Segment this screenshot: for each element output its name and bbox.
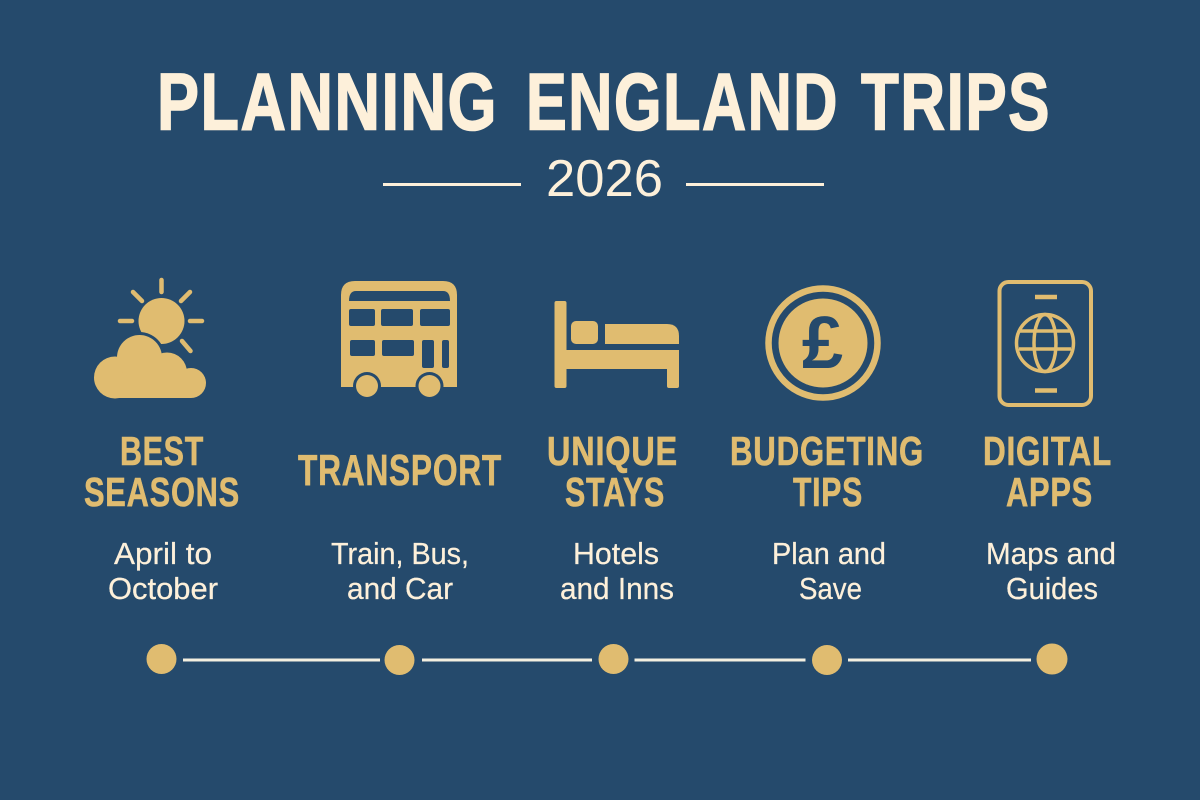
text: maps and guides (986, 536, 1116, 606)
icon: phone with globe (1000, 282, 1091, 405)
heading: best seasons: SEASONS (84, 469, 240, 515)
icon: pound coin (768, 288, 878, 398)
text: plan and save: Plan and (772, 536, 886, 571)
panel: digital apps (983, 282, 1116, 606)
subtitle: year with rules (383, 150, 824, 208)
icon: double-decker bus (341, 281, 457, 400)
heading: digital apps: DIGITAL (983, 428, 1112, 474)
icon: pound coin: £ (802, 301, 843, 384)
subtitle: year with rules: 2026 (546, 150, 663, 208)
title (157, 58, 1051, 148)
panel: unique stays (547, 301, 679, 606)
title: TRIPS (861, 58, 1051, 148)
panel: transport (298, 281, 502, 606)
text: april to october (108, 536, 218, 606)
text: april to october: April to (114, 536, 212, 571)
heading: budgeting tips: BUDGETING (730, 428, 924, 474)
heading: unique stays: STAYS (565, 469, 665, 515)
text: train, bus, and car (331, 536, 469, 606)
text: plan and save: Save (799, 571, 862, 606)
heading: best seasons (84, 428, 240, 515)
text: plan and save (772, 536, 886, 606)
heading: budgeting tips (730, 428, 924, 515)
text: hotels and inns (560, 536, 674, 606)
panel: budgeting tips (730, 288, 924, 606)
text: hotels and inns: and Inns (560, 571, 674, 606)
text: train, bus, and car: Train, Bus, (331, 536, 469, 571)
icon: sun and cloud (94, 280, 206, 398)
text: hotels and inns: Hotels (573, 536, 659, 571)
timeline (146, 644, 1068, 675)
title: PLANNING (157, 58, 498, 148)
heading: best seasons: BEST (120, 428, 204, 474)
heading: transport: TRANSPORT (298, 446, 502, 495)
text: maps and guides: Guides (1006, 571, 1098, 606)
text: maps and guides: Maps and (986, 536, 1116, 571)
heading: digital apps: APPS (1006, 469, 1093, 515)
heading: unique stays: UNIQUE (547, 428, 678, 474)
icon: bed (554, 301, 679, 388)
heading: budgeting tips: TIPS (793, 469, 863, 515)
text: train, bus, and car: and Car (347, 571, 453, 606)
text: april to october: October (108, 571, 218, 606)
heading: digital apps (983, 428, 1112, 515)
panel: best seasons (84, 280, 240, 606)
title: ENGLAND (526, 58, 839, 148)
heading: unique stays (547, 428, 678, 515)
